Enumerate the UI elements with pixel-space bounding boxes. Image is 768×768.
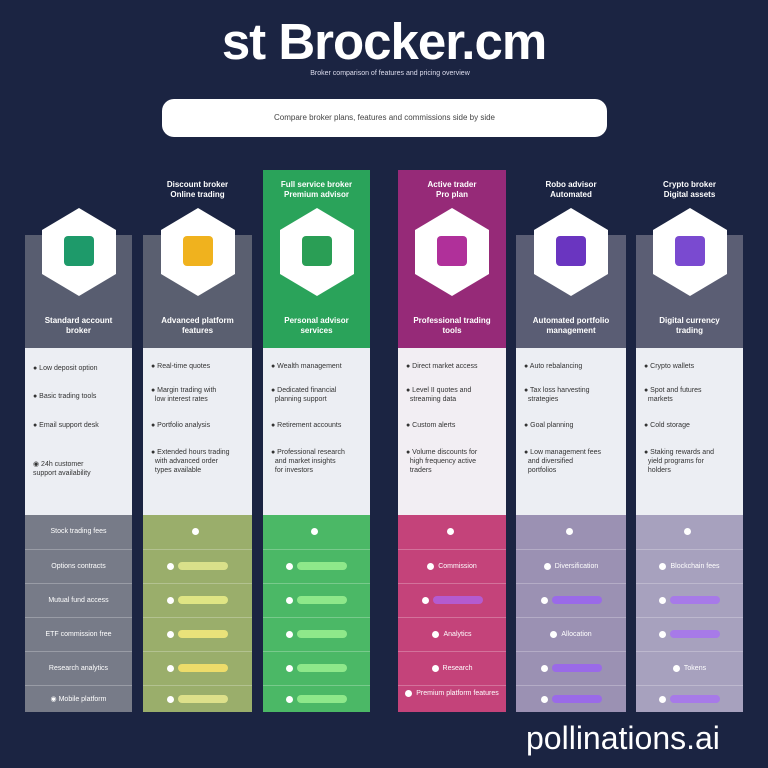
column 4: Pro plan: [436, 190, 468, 199]
column 6: Digital currency: [659, 316, 720, 325]
column 3: for investors: [275, 467, 313, 474]
column 1: ● Basic trading tools: [33, 393, 96, 400]
column 4: ● Volume discounts for: [406, 449, 477, 456]
column 3: ● Professional research: [271, 449, 345, 456]
column 5: ● Goal planning: [524, 422, 573, 429]
column 6: markets: [648, 396, 673, 403]
column 4: Analytics: [443, 631, 472, 638]
column 4: Premium platform features: [416, 690, 499, 697]
column 5: ● Tax loss harvesting: [524, 387, 590, 394]
column 5: strategies: [528, 396, 558, 403]
column 1: Stock trading fees: [50, 528, 107, 535]
icon hex 3: [280, 208, 354, 296]
column 3: ● Retirement accounts: [271, 422, 341, 429]
column 6: ● Spot and futures: [644, 387, 702, 394]
column 4: ● Direct market access: [406, 363, 478, 370]
column 5: and diversified: [528, 458, 573, 465]
column 5: [516, 180, 626, 712]
column 4: Commission: [438, 563, 477, 570]
banner pill: Compare broker plans, features and commissions side by side: [274, 113, 495, 122]
column 5: Allocation: [561, 631, 592, 638]
column 4: Professional trading: [413, 316, 491, 325]
column 6: Blockchain fees: [670, 563, 720, 570]
column 5: Automated: [550, 190, 592, 199]
column 1: Research analytics: [49, 665, 108, 672]
column 1: [25, 208, 132, 712]
column 4: [398, 170, 506, 712]
column 6: Digital assets: [664, 190, 715, 199]
column 1: Standard account: [45, 316, 112, 325]
column 4: Active trader: [428, 180, 476, 189]
column 3: Personal advisor: [284, 316, 349, 325]
column 4: streaming data: [410, 396, 456, 403]
column 4: traders: [410, 467, 432, 474]
column 1: ● Low deposit option: [33, 365, 98, 372]
column 2: ● Margin trading with: [151, 387, 216, 394]
column 5: ● Low management fees: [524, 449, 601, 456]
column 2: Discount broker: [167, 180, 228, 189]
column 1: ● Email support desk: [33, 422, 99, 429]
column 5: Diversification: [555, 563, 598, 570]
column 4: ● Level II quotes and: [406, 387, 471, 394]
column 2: ● Real-time quotes: [151, 363, 210, 370]
watermark: pollinations.ai: [526, 720, 720, 756]
column 6: yield programs for: [648, 458, 704, 465]
title: st Brocker.cm: [222, 13, 546, 70]
column 1: support availability: [33, 470, 91, 477]
column 3: ● Dedicated financial: [271, 387, 336, 394]
icon hex 4: [415, 208, 489, 296]
column 5: Robo advisor: [545, 180, 597, 189]
icon hex 6: [653, 208, 727, 296]
column 2: ● Extended hours trading: [151, 449, 230, 456]
column 6: ● Cold storage: [644, 422, 690, 429]
column 1: ETF commission free: [45, 631, 112, 638]
column 4: tools: [442, 326, 462, 335]
icon hex 1: [42, 208, 116, 296]
column 2: types available: [155, 467, 201, 474]
column 2: with advanced order: [155, 458, 218, 465]
column 1: Mutual fund access: [48, 597, 109, 604]
column 2: Online trading: [170, 190, 225, 199]
column 6: Crypto broker: [663, 180, 716, 189]
banner pill: [162, 99, 607, 137]
column 1: ◉ Mobile platform: [51, 696, 106, 703]
column 4: ● Custom alerts: [406, 422, 455, 429]
column 6: ● Crypto wallets: [644, 363, 694, 370]
column 5: portfolios: [528, 467, 556, 474]
column 5: ● Auto rebalancing: [524, 363, 582, 370]
column 3: Full service broker: [281, 180, 352, 189]
column 6: holders: [648, 467, 671, 474]
column 3: ● Wealth management: [271, 363, 342, 370]
subtitle: Broker comparison of features and pricing overview: [310, 70, 470, 77]
column 1: Options contracts: [51, 563, 106, 570]
column 4: high frequency active: [410, 458, 476, 465]
column 1: broker: [66, 326, 91, 335]
column 4: Research: [443, 665, 472, 672]
column 2: ● Portfolio analysis: [151, 422, 210, 429]
column 3: [263, 170, 370, 712]
column 6: Tokens: [684, 665, 706, 672]
icon hex 2: [161, 208, 235, 296]
column 2: low interest rates: [155, 396, 208, 403]
column 3: Premium advisor: [284, 190, 349, 199]
column 6: [636, 180, 743, 712]
column 3: services: [300, 326, 333, 335]
column 3: planning support: [275, 396, 327, 403]
column 5: management: [546, 326, 596, 335]
column 6: trading: [676, 326, 703, 335]
column 5: Automated portfolio: [533, 316, 609, 325]
column 1: ◉ 24h customer: [33, 461, 83, 468]
column 6: ● Staking rewards and: [644, 449, 714, 456]
column 2: features: [182, 326, 213, 335]
column 3: and market insights: [275, 458, 336, 465]
column 2: [143, 180, 252, 712]
icon hex 5: [534, 208, 608, 296]
column 2: Advanced platform: [161, 316, 234, 325]
